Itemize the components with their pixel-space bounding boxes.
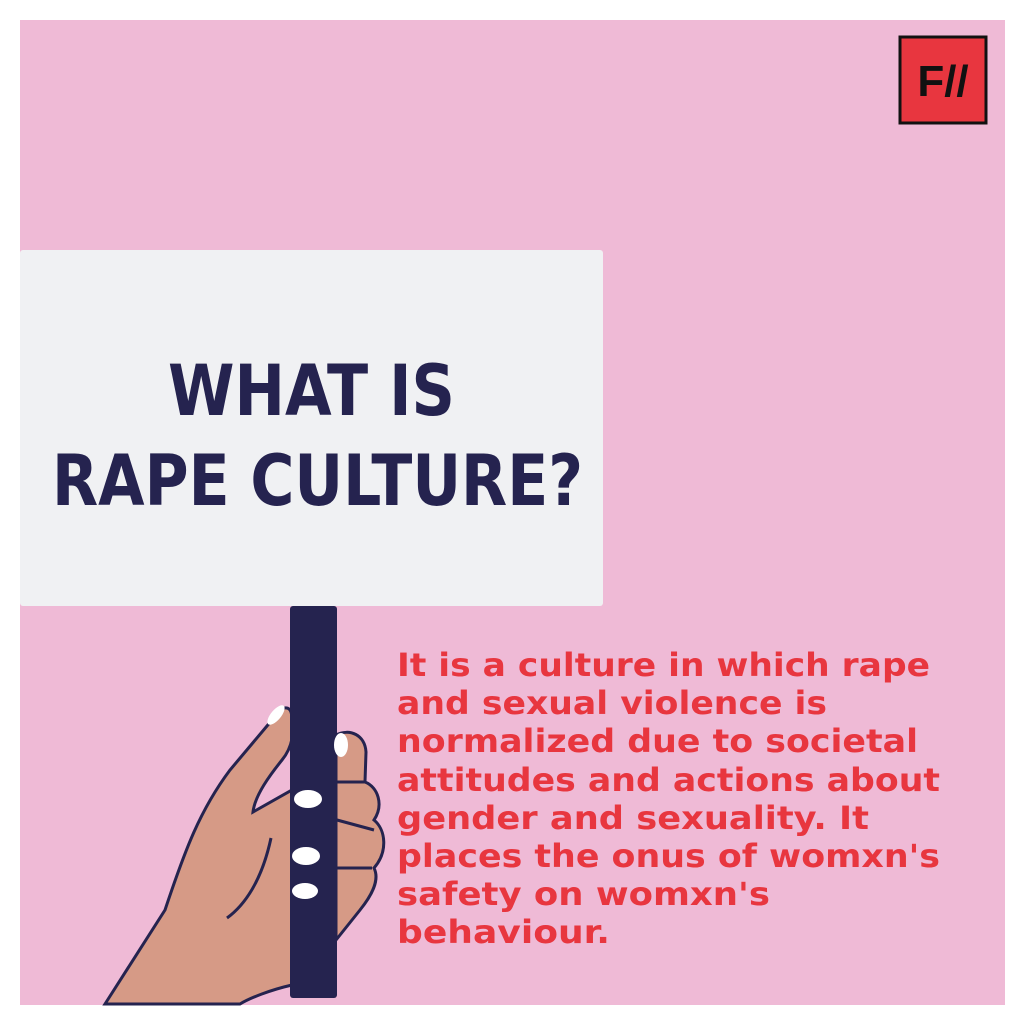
definition text: attitudes and actions about xyxy=(397,761,940,799)
definition text xyxy=(397,646,940,951)
nails xyxy=(264,703,348,899)
palm xyxy=(105,708,293,1004)
fingers xyxy=(336,732,384,940)
hand holding stick xyxy=(105,606,384,1004)
definition text: behaviour. xyxy=(397,913,610,951)
stick xyxy=(290,606,337,998)
title: RAPE CULTURE? xyxy=(52,440,583,522)
sign board xyxy=(20,250,603,606)
definition text: safety on womxn's xyxy=(397,875,770,913)
definition text: places the onus of womxn's xyxy=(397,837,940,875)
title: WHAT IS xyxy=(168,350,455,432)
definition text: normalized due to societal xyxy=(397,722,918,760)
logo xyxy=(900,37,986,123)
definition text: and sexual violence is xyxy=(397,684,827,722)
title xyxy=(52,350,583,522)
logo: F// xyxy=(917,57,969,106)
definition text: It is a culture in which rape xyxy=(397,646,930,684)
palm crease xyxy=(227,838,271,918)
definition text: gender and sexuality. It xyxy=(397,799,869,837)
